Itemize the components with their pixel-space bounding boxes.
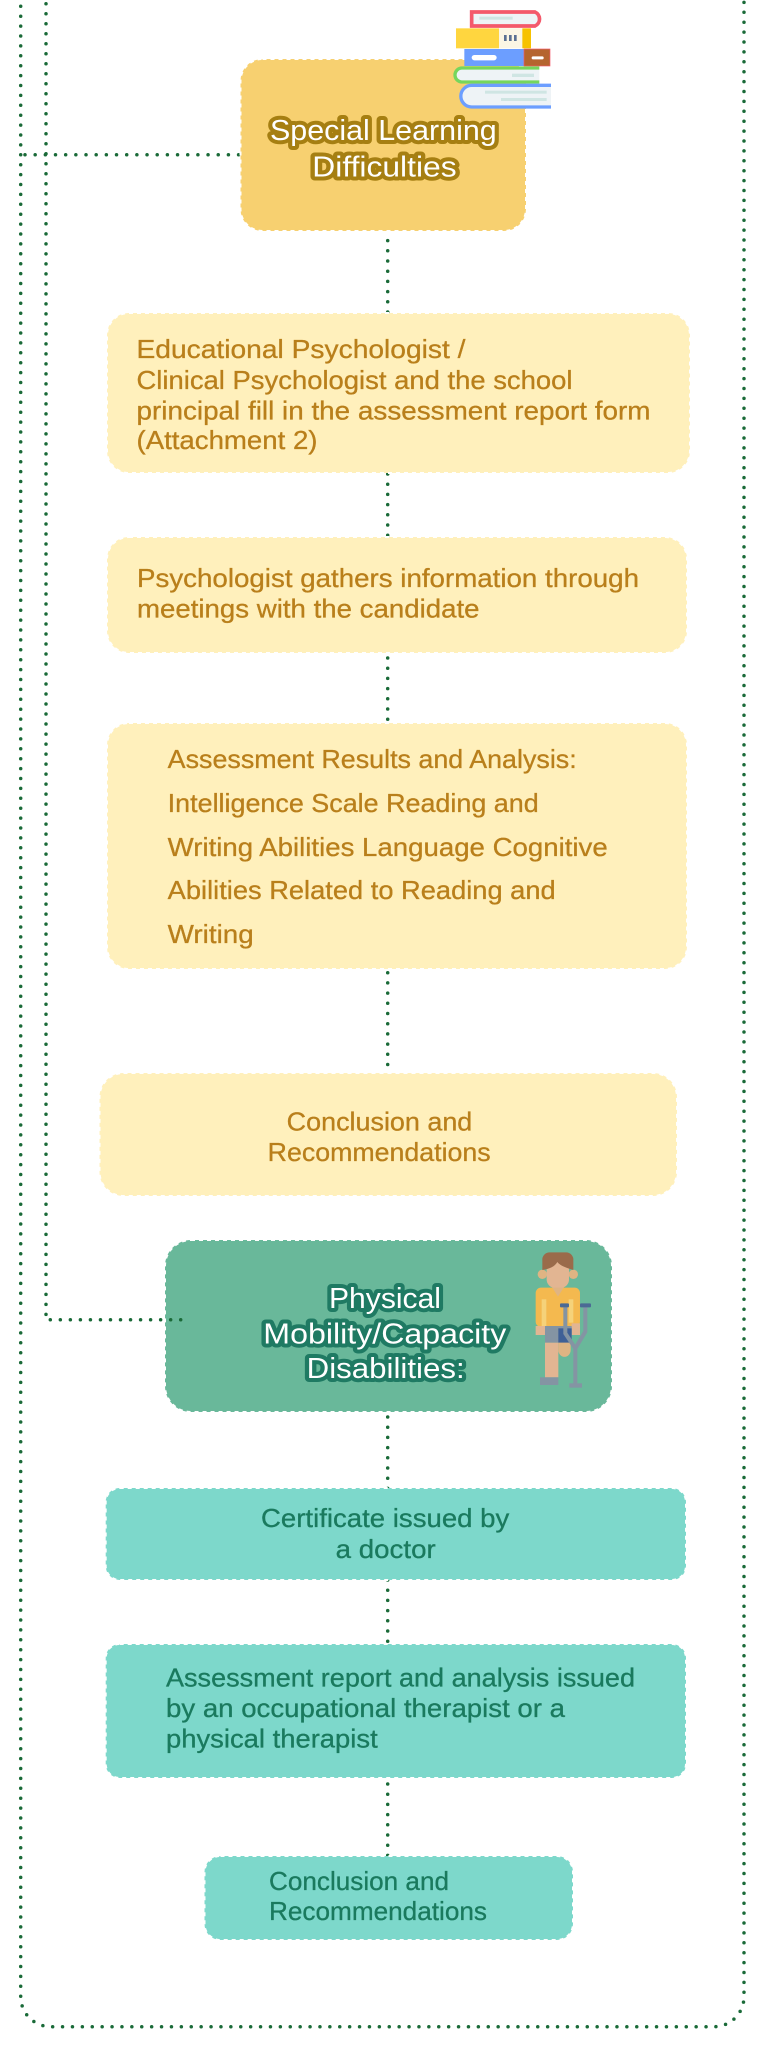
text: conclusion and recommendations <box>269 1866 487 1926</box>
heading: physical mobility capacity disabilities: Disabilities: <box>307 1353 465 1385</box>
heading: physical mobility capacity disabilities: Mobility/Capacity <box>263 1318 507 1350</box>
dotted connector to physical disabilities heading <box>50 1318 182 1321</box>
text: conclusion and recommendations: Recommendations <box>269 1896 487 1926</box>
heading: physical mobility capacity disabilities: Physical <box>329 1283 441 1315</box>
text: assessment results and analysis: Assessment Results and Analysis: <box>168 744 577 774</box>
text: assessment results and analysis: Intelligence Scale Reading and <box>168 788 539 818</box>
text: conclusion and recommendations <box>268 1107 491 1167</box>
panel: therapist assessment step <box>106 1644 686 1778</box>
text: assessment report and analysis <box>166 1663 635 1754</box>
panel: special learning difficulties heading <box>240 59 526 231</box>
panel: doctor certificate step <box>106 1488 686 1580</box>
text: assessment results and analysis: Writing <box>168 919 254 949</box>
icon: stack of books <box>455 12 551 107</box>
text: assessment report and analysis: by an occupational therapist or a <box>166 1693 566 1723</box>
text: assessment report form <box>136 334 650 455</box>
heading: special learning difficulties <box>270 115 497 184</box>
icon: person with crutch <box>536 1252 591 1388</box>
panel: information gathering step <box>107 537 687 653</box>
text: assessment report form: (Attachment 2) <box>136 425 318 455</box>
text: assessment report form: Clinical Psychologist and the school <box>136 365 572 395</box>
dotted connector to special learning difficulties <box>25 153 241 156</box>
text: certificate issued by a doctor: Certificate issued by <box>261 1503 509 1533</box>
text: assessment results and analysis: Abilities Related to Reading and <box>168 875 556 905</box>
text: certificate issued by a doctor: a doctor <box>336 1534 436 1564</box>
panel: conclusion step, physical disabilities <box>204 1856 573 1940</box>
text: conclusion and recommendations: Recommendations <box>268 1137 491 1167</box>
text: conclusion and recommendations: Conclusion and <box>269 1866 449 1896</box>
center dotted connectors <box>386 241 389 1858</box>
text: information gathering: meetings with the candidate <box>137 594 480 624</box>
panel: physical mobility disabilities heading <box>165 1240 612 1412</box>
text: assessment report form: Educational Psychologist / <box>136 334 466 364</box>
text: assessment report and analysis: physical therapist <box>166 1724 379 1754</box>
panel: conclusion step, learning difficulties <box>100 1073 677 1196</box>
text: assessment report and analysis: Assessment report and analysis issued <box>166 1663 635 1693</box>
text: information gathering: Psychologist gathers information through <box>137 563 639 593</box>
text: assessment report form: principal fill in the assessment report form <box>136 396 650 426</box>
panel: assessment report form step <box>107 313 690 473</box>
panel: assessment results step <box>107 723 687 969</box>
text: assessment results and analysis: Writing Abilities Language Cognitive <box>168 832 608 862</box>
heading: special learning difficulties: Special Learning <box>270 115 497 147</box>
dotted branch line to physical disabilities <box>44 4 48 1316</box>
text: assessment results and analysis <box>168 744 608 949</box>
heading: special learning difficulties: Difficulties <box>312 152 457 184</box>
text: certificate issued by a doctor <box>261 1503 509 1564</box>
text: information gathering <box>137 563 639 624</box>
heading: physical mobility capacity disabilities <box>263 1283 507 1385</box>
text: conclusion and recommendations: Conclusion and <box>287 1107 472 1137</box>
